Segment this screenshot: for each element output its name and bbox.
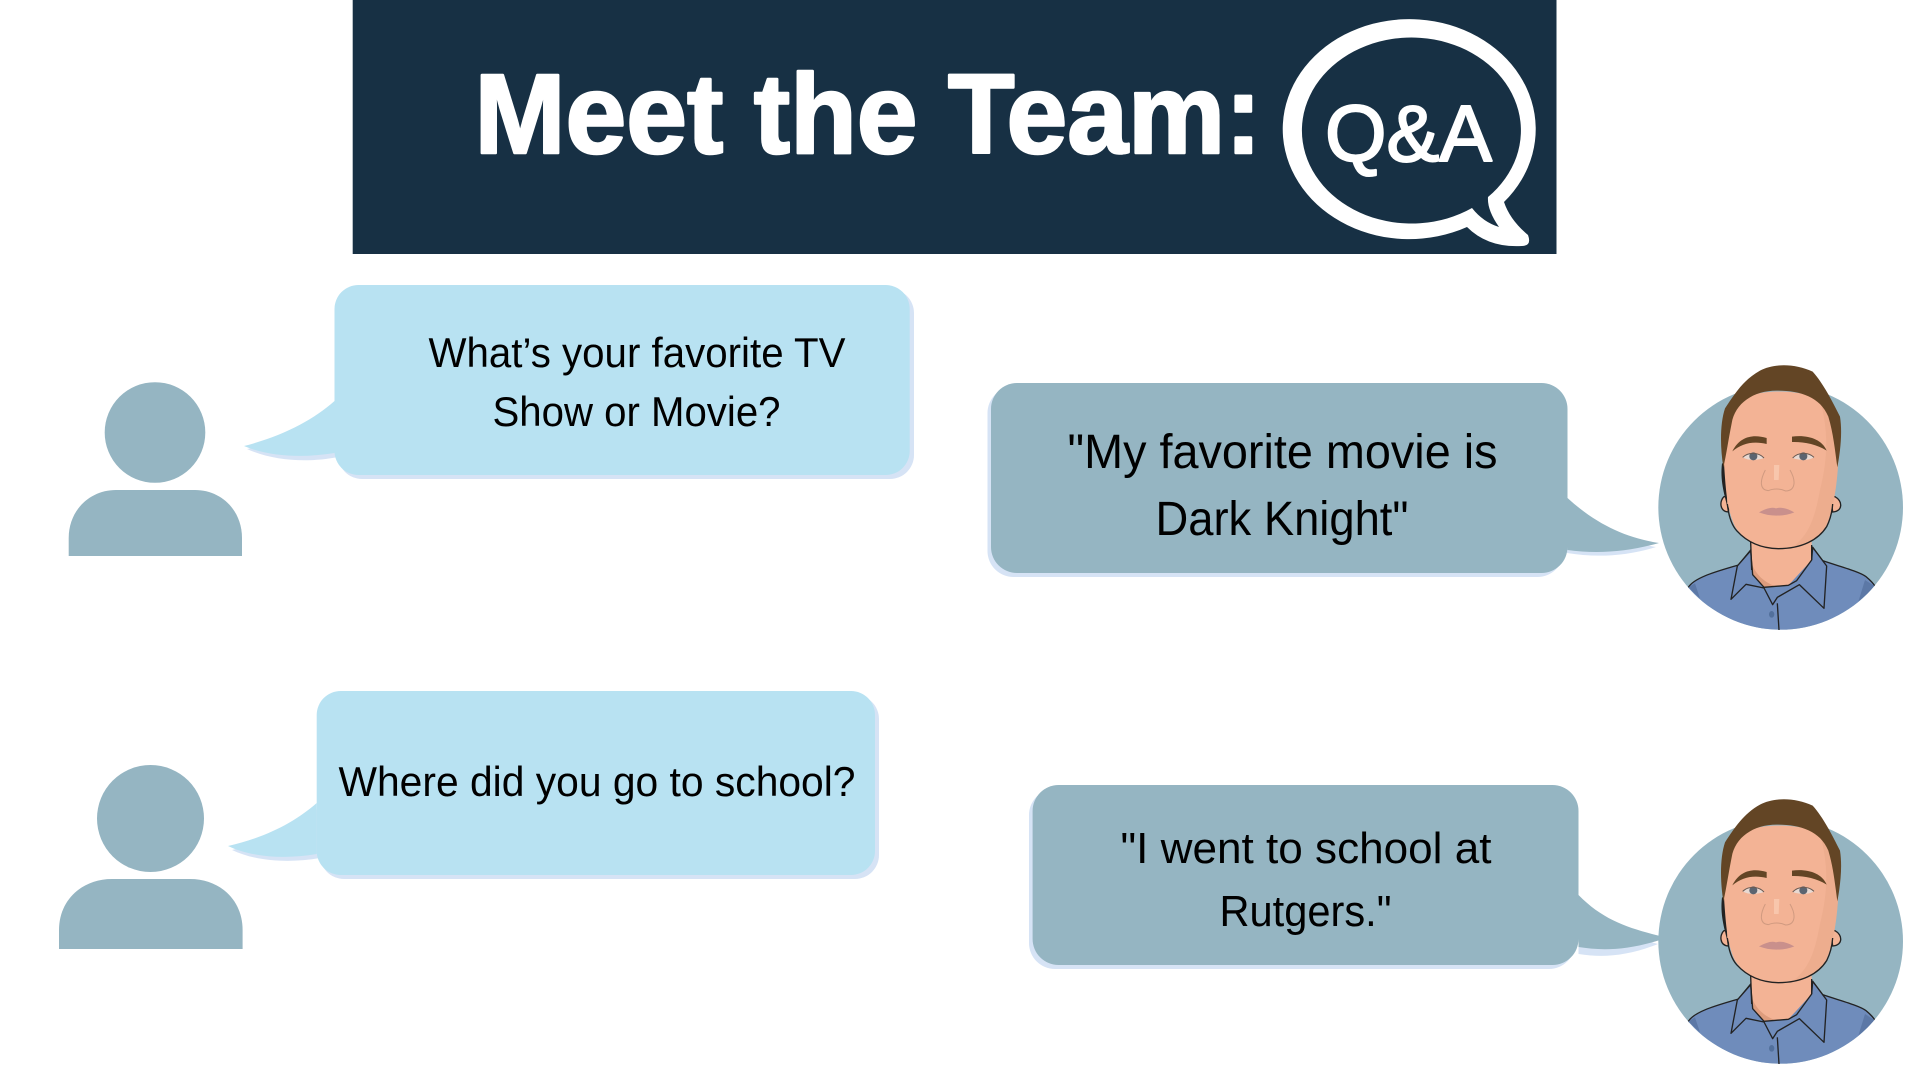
speech bubble: question 1 — [244, 285, 914, 479]
title: Meet the Team: — [474, 51, 1262, 177]
avatar: team member 1 — [1658, 365, 1903, 650]
icon: Q&A speech bubble — [1283, 19, 1536, 246]
answer text 2: Rutgers." — [1220, 887, 1392, 936]
question text 1: Show or Movie? — [492, 388, 780, 435]
icon: person silhouette 1 — [69, 382, 242, 556]
answer text 1 — [1068, 426, 1498, 546]
avatar: team member 2 — [1658, 799, 1903, 1080]
question text 2: Where did you go to school? — [338, 758, 856, 805]
speech bubble: answer 1 — [988, 383, 1659, 577]
question text 1 — [428, 329, 846, 435]
answer text 1: "My favorite movie is — [1068, 426, 1498, 479]
speech bubble: answer 2 — [1029, 785, 1660, 969]
answer text 2: "I went to school at — [1120, 824, 1492, 873]
answer text 1: Dark Knight" — [1156, 493, 1408, 546]
icon: person silhouette 2 — [59, 765, 243, 949]
title banner — [353, 0, 1557, 254]
answer text 2 — [1120, 824, 1492, 936]
question text 1: What’s your favorite TV — [428, 329, 846, 376]
speech bubble: question 2 — [228, 691, 879, 879]
icon: Q&A speech bubble: Q&A — [1325, 89, 1493, 178]
